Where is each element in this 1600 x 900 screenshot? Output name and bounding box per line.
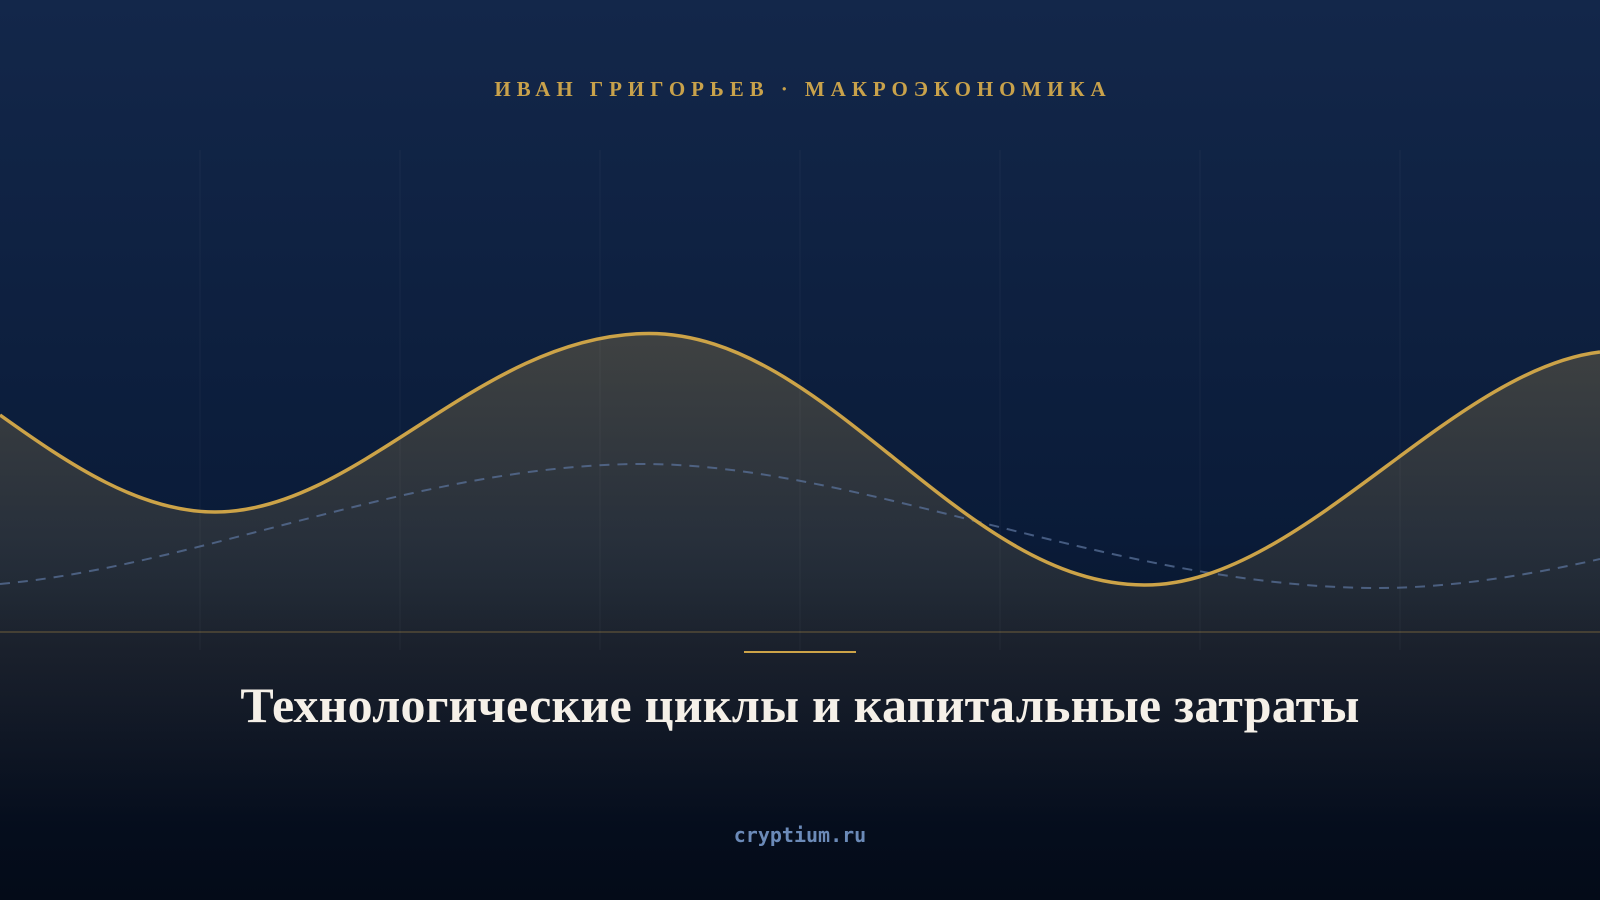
vertical grid lines: [200, 150, 1400, 650]
title: Технологические циклы и капитальные затраты: [240, 677, 1360, 733]
cycle area fill: [0, 334, 1600, 900]
site url: cryptium.ru: [734, 823, 866, 847]
author kicker: ИВАН ГРИГОРЬЕВ · МАКРОЭКОНОМИКА: [494, 77, 1112, 101]
divider accent: [744, 651, 856, 653]
chart baseline: [0, 631, 1600, 633]
technology cycle curve: [0, 334, 1600, 585]
dashed capital expenditure curve: [0, 464, 1600, 588]
